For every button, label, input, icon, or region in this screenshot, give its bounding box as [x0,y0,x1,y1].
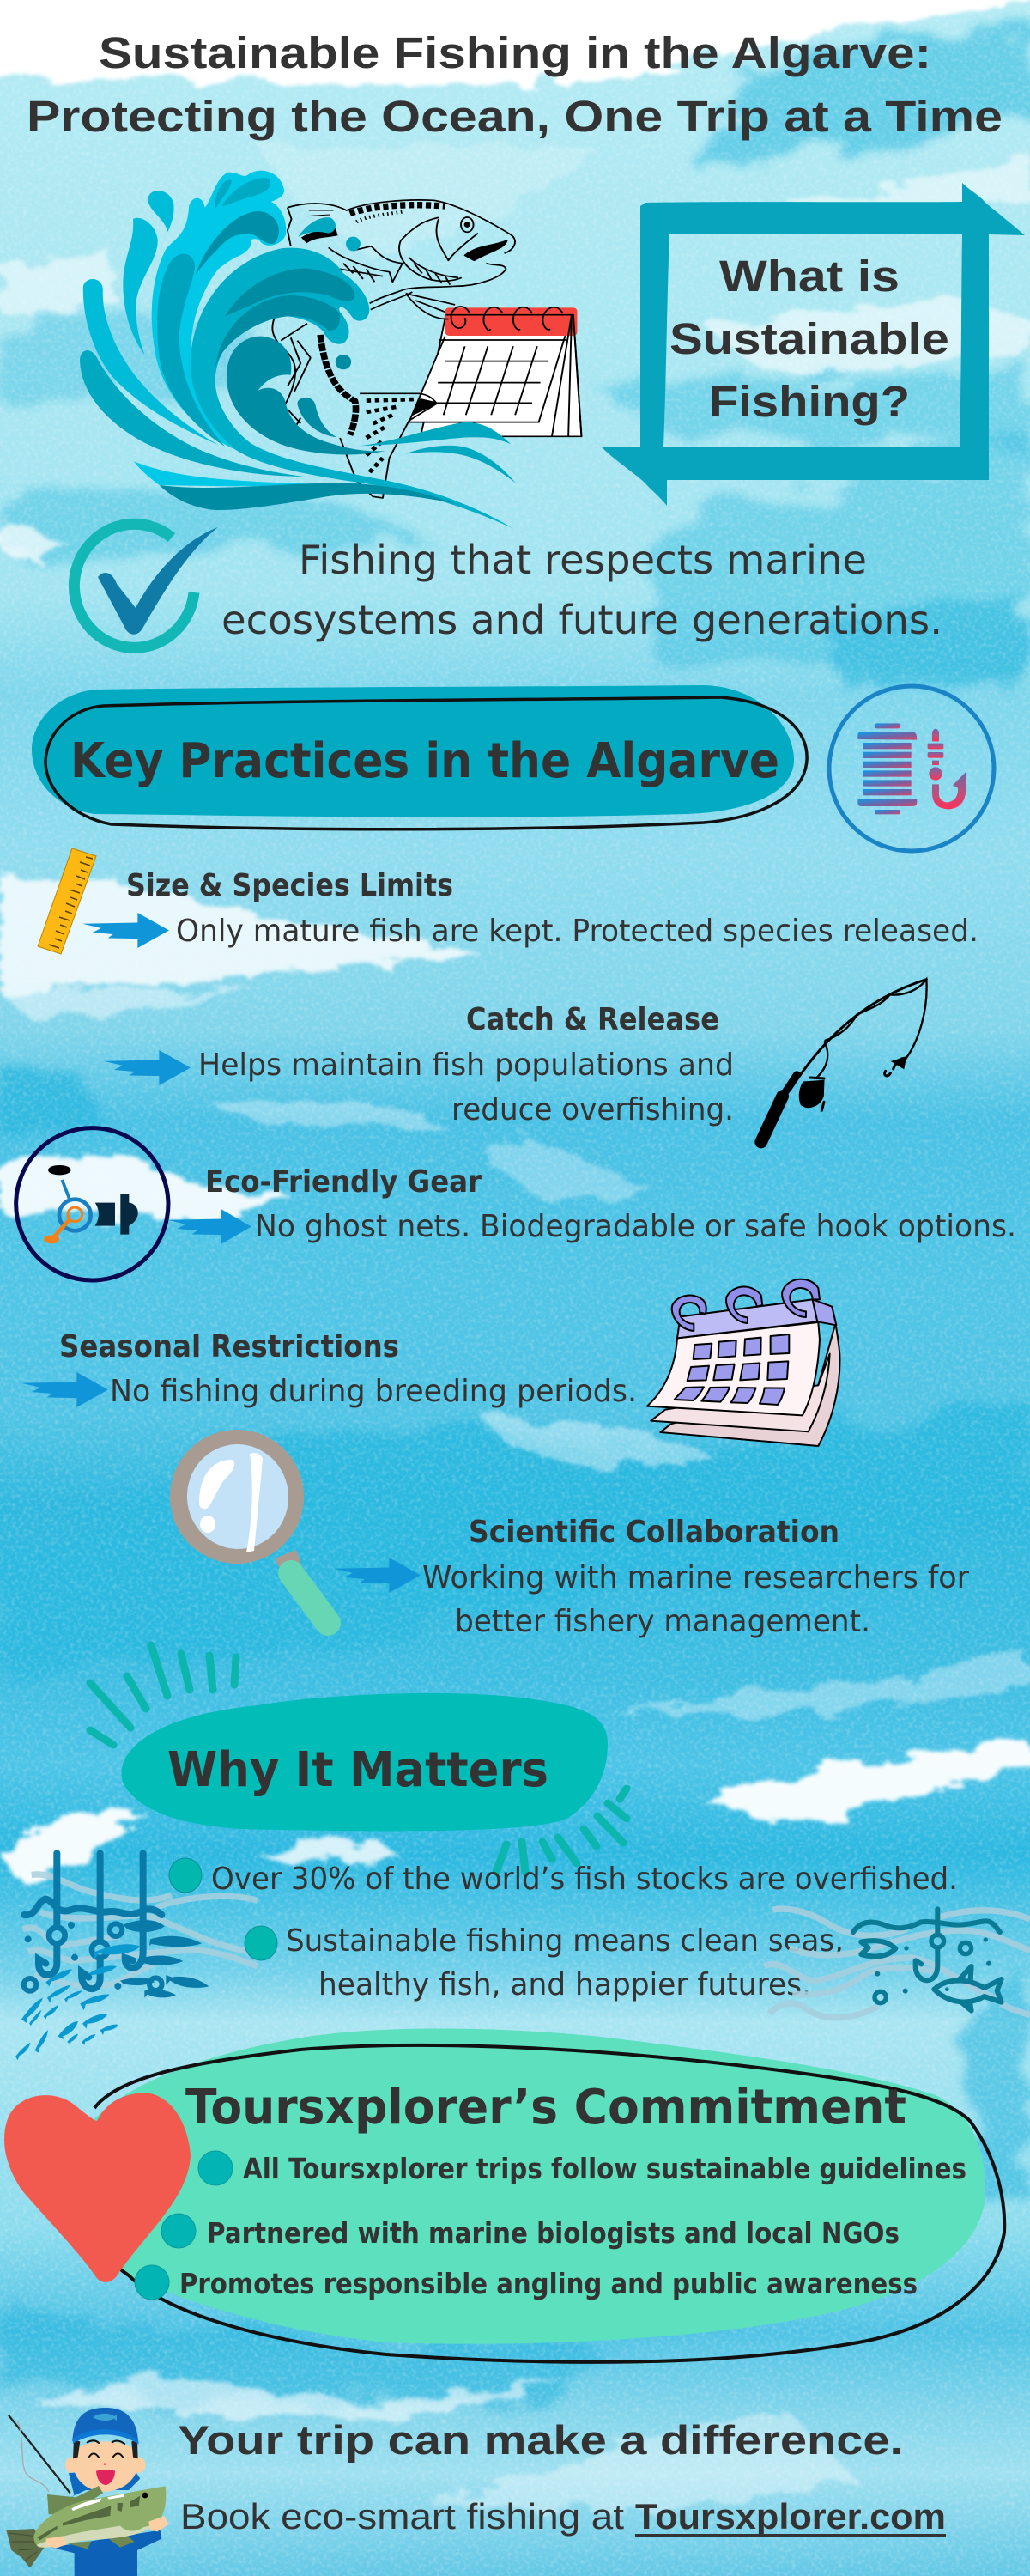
practice: eco-friendly gear [16,1128,1016,1280]
definition text: ecosystems and future generations. [221,597,942,643]
definition text [221,537,942,643]
bullet list: why it matters [169,1858,958,2002]
icon: desk calendar [647,1279,839,1446]
fish line drawing [272,200,515,498]
icon: reel circle [16,1128,168,1280]
bullet list: why it matters: Over 30% of the world’s fish stocks are overfished. [211,1862,958,1897]
practice: eco-friendly gear: Eco-Friendly Gear [205,1164,482,1200]
bullet [161,2214,196,2248]
icon: fishing rod [761,980,927,1142]
speech frame: what is sustainable fishing: What is [719,252,900,301]
bullet [169,1858,202,1893]
practice: eco-friendly gear: No ghost nets. Biodegradable or safe hook options. [255,1209,1016,1244]
panel: Toursxplorer's commitment: Promotes responsible angling and public awareness [179,2267,918,2300]
title: Sustainable Fishing in the Algarve: [99,28,931,77]
title [27,28,1003,141]
practice: size and species limits: Size & Species Limits [126,868,453,903]
call to action [178,2417,946,2537]
practice: catch and release: Catch & Release [466,1002,719,1037]
decoration: hook and fish right [764,1909,1030,2018]
speech frame: what is sustainable fishing: Sustainable [670,314,949,363]
panel: Toursxplorer's commitment [4,2029,1004,2362]
icon: magnifying glass [154,1414,328,1623]
practice: catch and release: Helps maintain fish populations and [198,1048,734,1083]
arrow [167,1209,251,1244]
heading: key practices [32,685,807,829]
bullet [245,1926,277,1960]
decorative burst lines [90,1645,627,1872]
bullet list: why it matters: Sustainable fishing means clean seas, [286,1923,844,1959]
practice: size and species limits [38,848,978,954]
speech frame: what is sustainable fishing: Fishing? [709,377,910,426]
practice: scientific collaboration: better fishery management. [455,1604,870,1639]
arrow [334,1558,421,1593]
title: Protecting the Ocean, One Trip at a Time [27,92,1003,141]
arrow [21,1372,108,1407]
illustration: fisherman holding fish [6,2408,169,2576]
panel: Toursxplorer's commitment: Partnered with marine biologists and local NGOs [207,2216,900,2250]
practice: seasonal restrictions: Seasonal Restrictions [59,1329,399,1364]
practice: catch and release: reduce overfishing. [451,1092,734,1127]
call to action: Book eco-smart fishing at [180,2496,624,2537]
practice: scientific collaboration [154,1414,969,1639]
call to action: Toursxplorer.com [635,2496,946,2537]
definition text: Fishing that respects marine [299,537,867,583]
practice: scientific collaboration: Scientific Collaboration [469,1515,839,1550]
arrow [82,913,169,948]
practice: seasonal restrictions [21,1279,839,1446]
heading: why it matters: Why It Matters [167,1742,548,1798]
icon: check mark in circle [74,524,218,647]
icon: spool and hook [829,686,994,851]
bullet [198,2151,233,2185]
practice: seasonal restrictions: No fishing during breeding periods. [110,1374,637,1409]
bullet [135,2265,169,2300]
illustration: fish, wave and calendar [80,171,581,528]
heading: why it matters [90,1645,627,1872]
arrow [104,1050,191,1085]
practice: scientific collaboration: Working with marine researchers for [422,1560,969,1595]
decoration: fish hooks and school of fish [15,1853,258,2060]
heading: key practices: Key Practices in the Algarve [70,733,779,789]
icon: watercolor heart [4,2093,191,2282]
speech frame: what is sustainable fishing [601,183,1025,506]
panel: Toursxplorer's commitment: Toursxplorer’s Commitment [185,2080,906,2136]
calendar [409,307,581,436]
bullet list: why it matters: healthy fish, and happier futures. [318,1967,811,2002]
icon: ruler [38,848,96,954]
wave [80,171,516,528]
call to action: Your trip can make a difference. [178,2417,903,2463]
practice: catch and release [104,980,927,1142]
practice: size and species limits: Only mature fish are kept. Protected species released. [176,914,978,949]
